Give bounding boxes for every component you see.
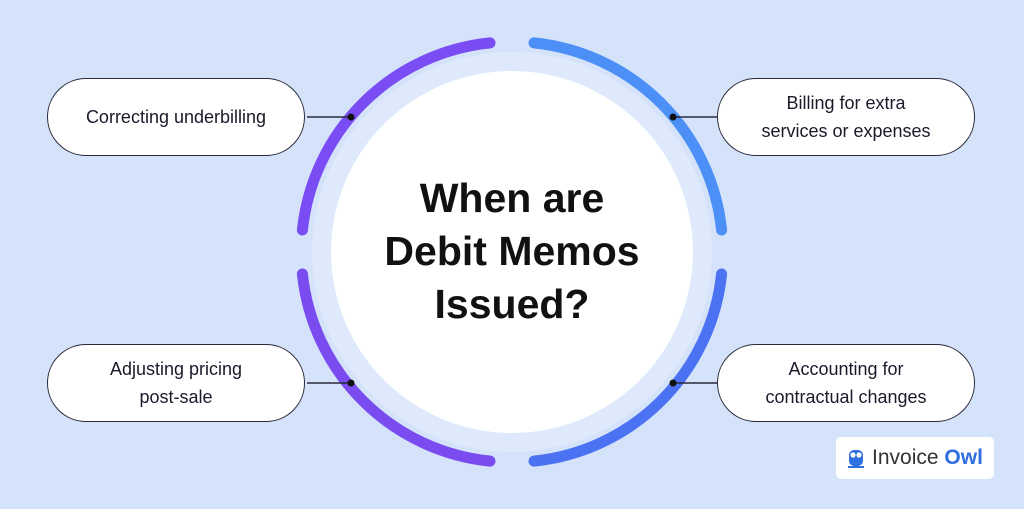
arc: top-left — [302, 43, 490, 230]
title: Debit Memos — [384, 228, 640, 274]
title: Issued? — [435, 281, 589, 327]
logo — [836, 437, 994, 479]
title: When are — [420, 175, 604, 221]
connectors — [307, 117, 717, 383]
logo: Owl — [944, 446, 983, 469]
pill: correcting underbilling: Correcting underbilling — [86, 107, 266, 127]
pill: adjusting pricing: post-sale — [139, 387, 213, 407]
pill: billing for extra: Billing for extra — [786, 93, 906, 113]
pill: adjusting pricing — [47, 344, 305, 422]
arc: bottom-left — [302, 274, 490, 461]
pill: accounting: Accounting for — [788, 359, 904, 379]
logo: Invoice — [872, 446, 939, 469]
arc: bottom-right — [534, 274, 722, 461]
pill: adjusting pricing: Adjusting pricing — [110, 359, 242, 379]
pill: billing for extra: services or expenses — [761, 121, 931, 141]
pill: accounting: contractual changes — [765, 387, 927, 407]
pill: billing for extra — [717, 78, 975, 156]
pill: accounting — [717, 344, 975, 422]
title — [384, 175, 640, 327]
pill: correcting underbilling — [47, 78, 305, 156]
arc: top-right — [534, 43, 722, 230]
icon: owl — [848, 450, 864, 468]
